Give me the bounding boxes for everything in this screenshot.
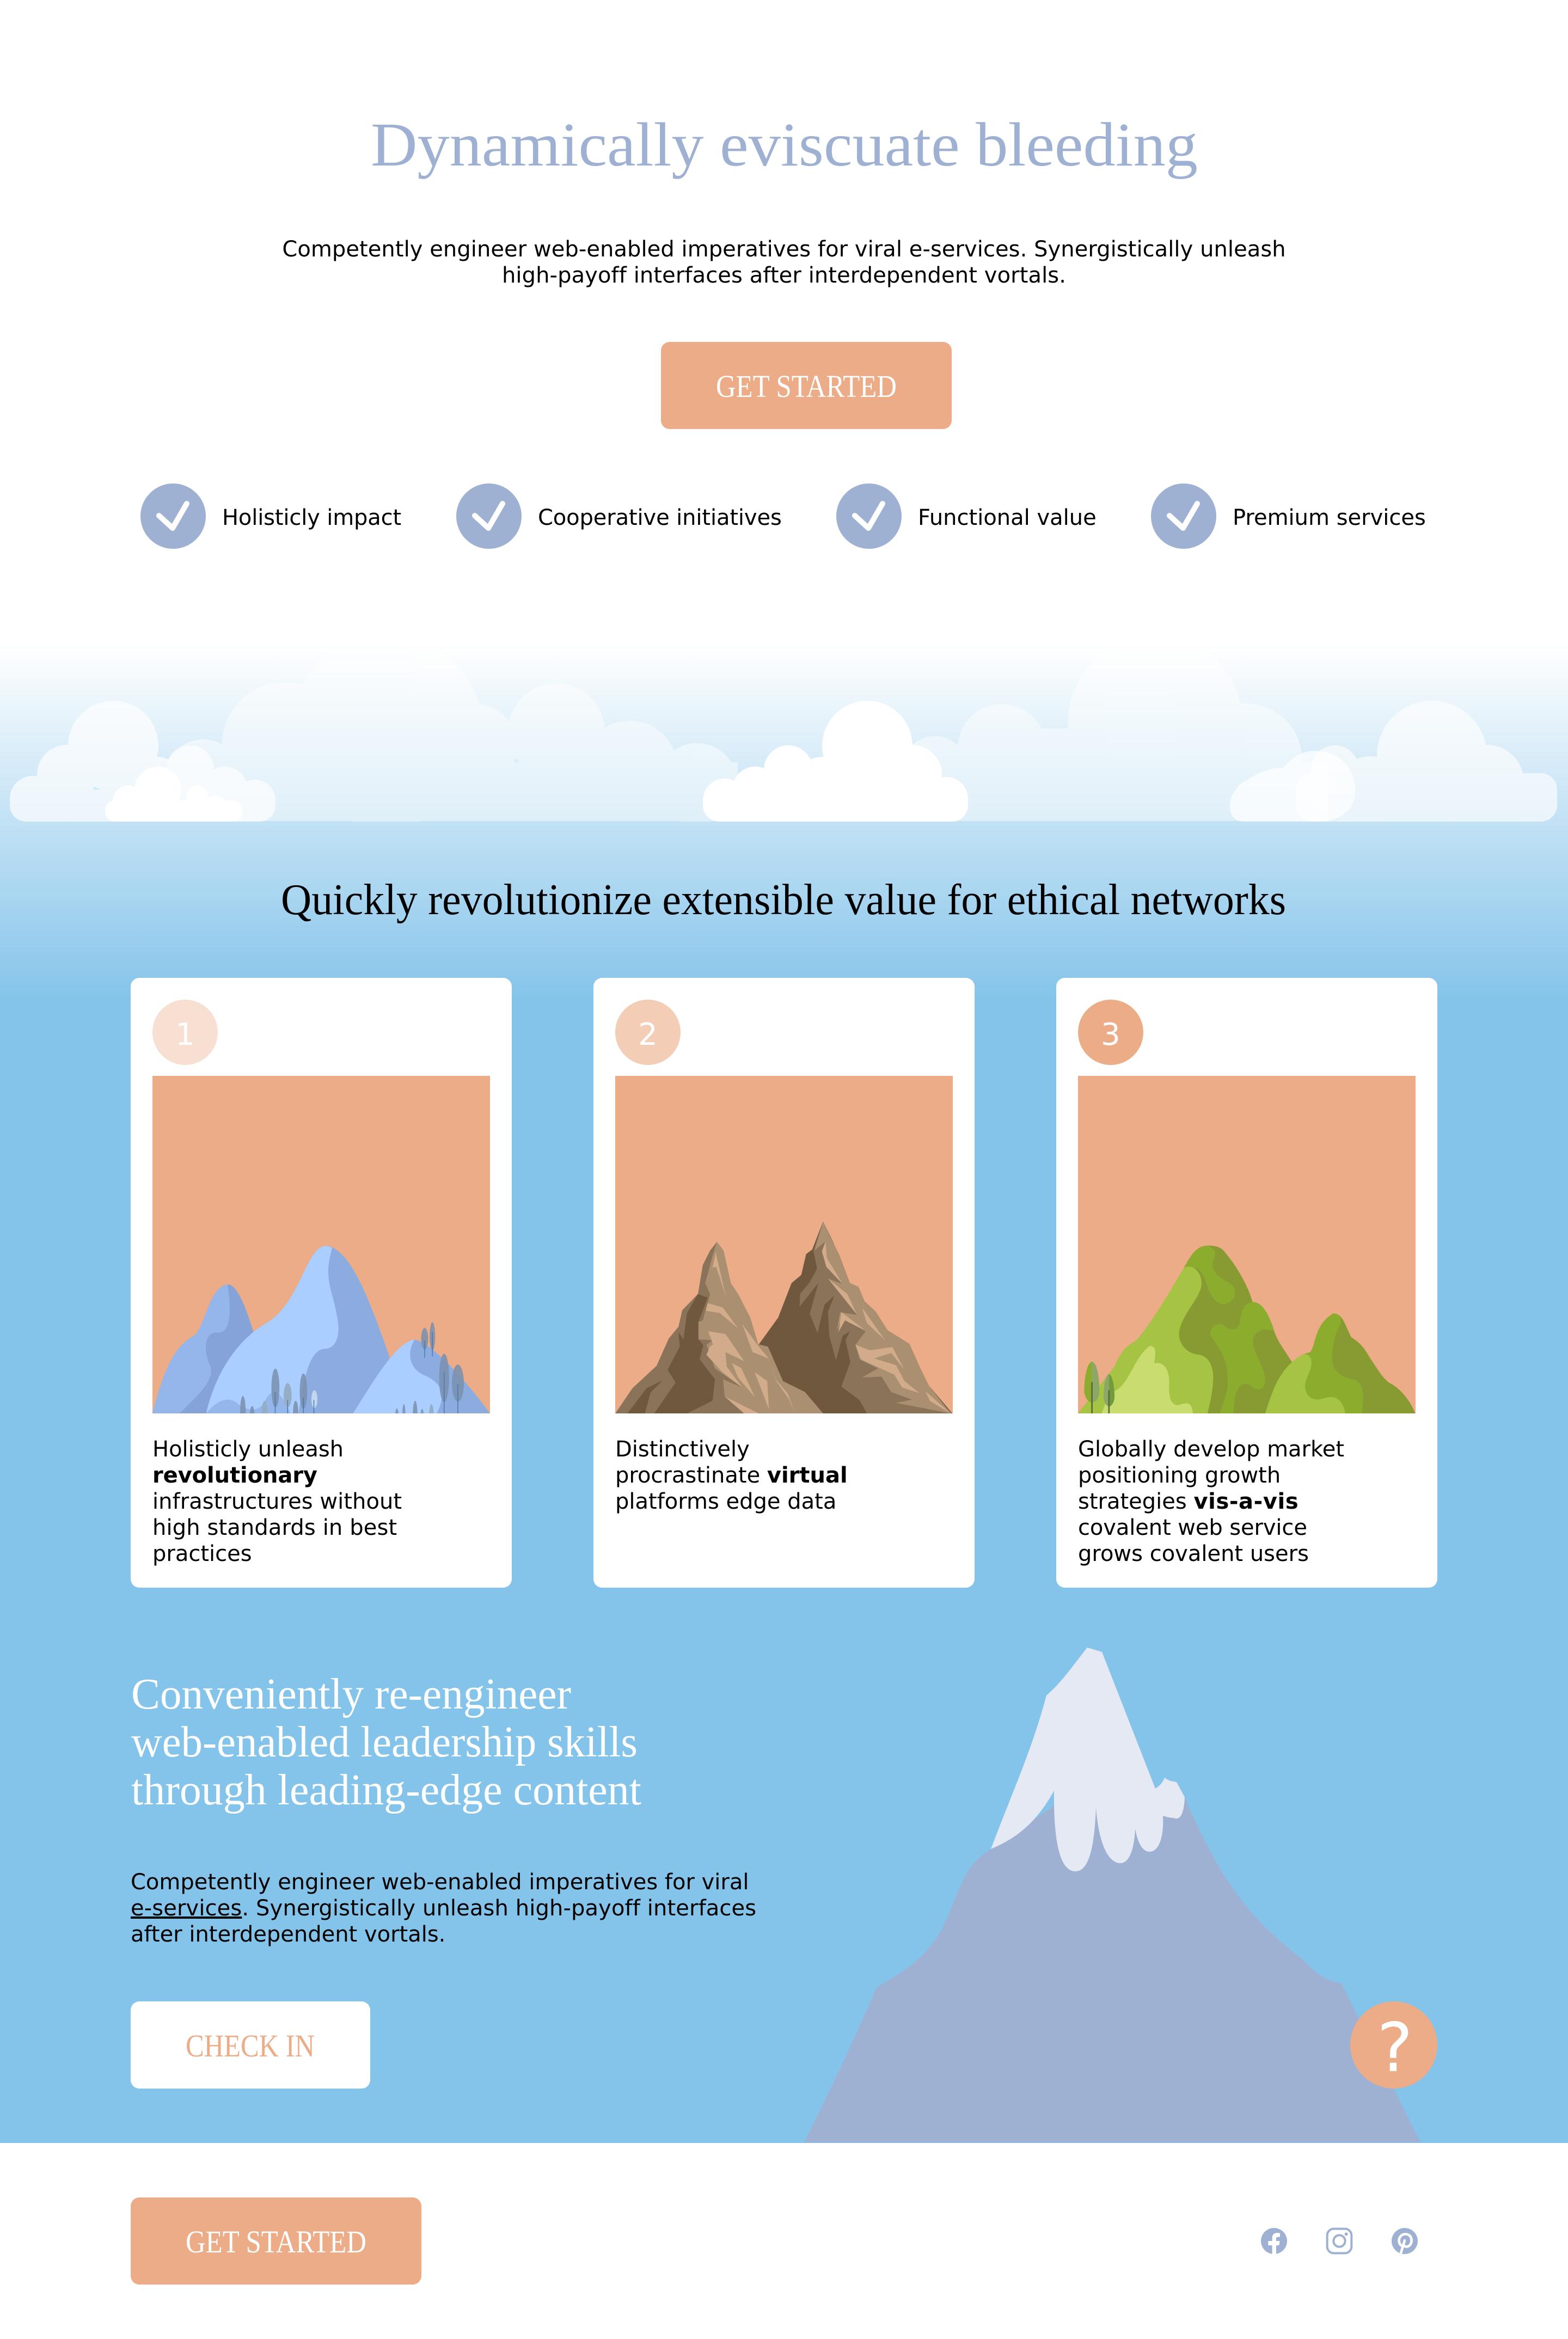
- card 1: [131, 978, 512, 1588]
- help button: ?: [1377, 2009, 1413, 2087]
- cloud: front middle: [703, 701, 968, 822]
- title: Dynamically eviscuate bleeding: [371, 110, 1198, 179]
- subheading: web-enabled leadership skills: [131, 1718, 638, 1766]
- subheading: Conveniently re-engineer: [131, 1670, 571, 1718]
- icon: instagram: [1327, 2229, 1351, 2253]
- card 1 text: revolutionary: [152, 1463, 317, 1488]
- feature: functional value: Functional value: [918, 505, 1097, 530]
- help button: [1350, 2001, 1437, 2089]
- step number 3: [1078, 1000, 1143, 1065]
- footer button: get started: GET STARTED: [186, 2224, 366, 2260]
- card 2: [593, 978, 975, 1588]
- card 2 text: platforms edge data: [615, 1489, 836, 1514]
- card 3 text: Globally develop market: [1078, 1437, 1344, 1462]
- intro text: high-payoff interfaces after interdependent vortals.: [502, 263, 1066, 288]
- card 3 text: [1078, 1436, 1426, 1567]
- step number 2: [615, 1000, 681, 1065]
- icon: pinterest: [1392, 2228, 1418, 2254]
- illustration: blue mountains: [152, 1076, 490, 1428]
- step number 3: 3: [1101, 1017, 1120, 1052]
- icon: facebook: [1261, 2228, 1287, 2254]
- illustration: snow-capped mountain: [804, 1648, 1420, 2142]
- social icons: [1261, 2228, 1418, 2254]
- card 2 text: procrastinate virtual: [615, 1463, 848, 1488]
- card 1 text: infrastructures without: [152, 1489, 402, 1514]
- feature: functional value: [836, 483, 1179, 549]
- step number 2: 2: [638, 1017, 658, 1052]
- cloud: left: [10, 701, 275, 822]
- card 3 text: covalent web service: [1078, 1515, 1307, 1540]
- section heading: Quickly revolutionize extensible value for ethical networks: [281, 876, 1286, 924]
- footer button: get started: [131, 2197, 421, 2285]
- cloud: large back left: [179, 696, 738, 822]
- card 1 text: Holisticly unleash: [152, 1437, 344, 1462]
- illustration: brown mountains: [615, 1076, 953, 1413]
- subheading: through leading-edge content: [131, 1766, 641, 1814]
- feature: premium services: [1151, 483, 1494, 549]
- button: get started: GET STARTED: [716, 369, 897, 404]
- subheading: [131, 1670, 641, 1814]
- cloud: right: [1296, 701, 1557, 822]
- body paragraph: after interdependent vortals.: [131, 1922, 445, 1947]
- card 3: [1056, 978, 1437, 1588]
- illustration: green mountains: [1078, 1076, 1416, 1413]
- feature: cooperative initiatives: Cooperative initiatives: [538, 505, 782, 530]
- button: check in: [131, 2001, 370, 2089]
- card 1 text: practices: [152, 1541, 252, 1566]
- cloud: large back right: [912, 694, 1328, 821]
- card 2 text: Distinctively: [615, 1437, 750, 1462]
- body paragraph: e-services. Synergistically unleash high-payoff interfaces: [131, 1896, 756, 1921]
- cloud: small front right: [1230, 751, 1355, 822]
- card 3 text: strategies vis-a-vis: [1078, 1489, 1298, 1514]
- card 3 text: grows covalent users: [1078, 1541, 1309, 1566]
- feature: holisticly impact: Holisticly impact: [222, 505, 401, 530]
- body paragraph: [131, 1869, 838, 1948]
- background: blue section: [0, 999, 1568, 2143]
- card 1 text: high standards in best: [152, 1515, 397, 1540]
- feature: cooperative initiatives: [456, 483, 865, 549]
- cloud: small front left: [105, 767, 242, 823]
- button: get started: [661, 342, 952, 429]
- intro text: [131, 236, 1437, 289]
- card 2 text: [615, 1436, 964, 1567]
- step number 1: 1: [175, 1017, 195, 1052]
- feature checklist: [140, 483, 1494, 549]
- intro text: Competently engineer web-enabled imperatives for viral e-services. Synergistically unleash: [282, 237, 1286, 262]
- feature: holisticly impact: [140, 483, 483, 549]
- background: sky gradient: [0, 645, 1568, 1000]
- clouds: [10, 694, 1557, 822]
- step number 1: [152, 1000, 218, 1065]
- feature: premium services: Premium services: [1233, 505, 1426, 530]
- button: check in: CHECK IN: [186, 2028, 315, 2064]
- card 3 text: positioning growth: [1078, 1463, 1281, 1488]
- body paragraph: Competently engineer web-enabled imperatives for viral: [131, 1870, 749, 1895]
- card 1 text: [152, 1436, 501, 1567]
